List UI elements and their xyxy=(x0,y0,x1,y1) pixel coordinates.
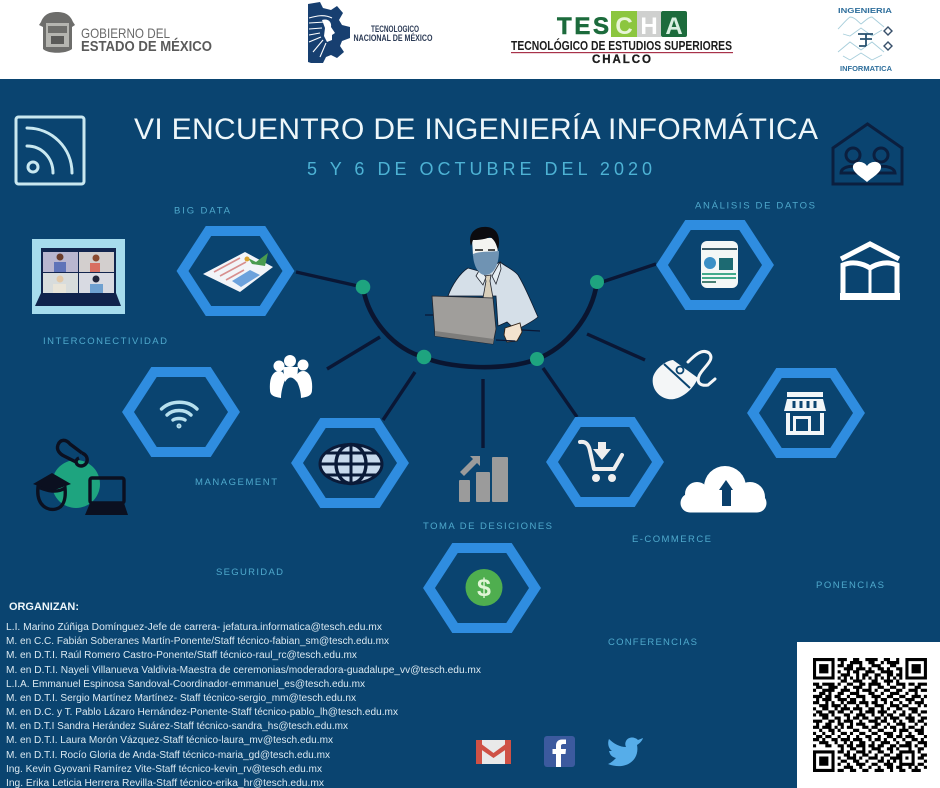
hexagon: finance xyxy=(429,548,535,628)
qr code xyxy=(797,642,940,788)
logo: TESCHA xyxy=(511,11,733,66)
label: security: SEGURIDAD xyxy=(216,567,283,578)
icon: twitter xyxy=(608,737,643,766)
connector lines xyxy=(296,264,656,448)
icon: gmail xyxy=(476,740,511,764)
icon: facebook xyxy=(544,736,575,767)
logo: Gobierno del Estado de México: GOBIERNO DEL xyxy=(81,25,170,41)
logo: Tecnológico Nacional de México xyxy=(308,2,432,63)
organizers list: Ing. Kevin Gyovani Ramírez Vite-Staff técnico-kevin_rv@tesch.edu.mx xyxy=(6,764,322,775)
logo: TESCHA: TES xyxy=(557,13,609,40)
icon: open book under roof xyxy=(840,244,900,300)
icon: dashboard document xyxy=(701,241,738,288)
hexagon: global xyxy=(297,423,403,503)
logo: Tecnológico Nacional de México: TECNOLOGICO xyxy=(371,24,419,34)
logo: Gobierno del Estado de México: ESTADO DE MÉXICO xyxy=(81,38,212,55)
logo: TESCHA: C xyxy=(615,13,633,40)
logo: TESCHA: TECNOLÓGICO DE ESTUDIOS SUPERIORES xyxy=(511,38,732,53)
header band with logos xyxy=(0,0,940,79)
label: interconnectivity: INTERCONECTIVIDAD xyxy=(43,336,167,347)
icon: computer mouse xyxy=(653,351,715,399)
icon: people group xyxy=(270,355,312,398)
hexagon: big data xyxy=(182,231,288,311)
icon: globe xyxy=(320,444,382,484)
hexagon: e-commerce xyxy=(552,422,658,502)
icon: report chart xyxy=(203,252,273,292)
labels xyxy=(43,200,884,648)
logo: TESCHA: H xyxy=(640,13,658,40)
icon: graduation and laptop xyxy=(33,440,128,515)
label: management: MANAGEMENT xyxy=(195,477,277,488)
icon: wifi xyxy=(162,402,197,427)
label: decision making: TOMA DE DESICIONES xyxy=(423,521,552,532)
organizers list xyxy=(6,622,481,788)
icon: storefront xyxy=(784,392,826,435)
organizers list: M. en D.T.I. Laura Morón Vázquez-Staff técnico-laura_mv@tesch.edu.mx xyxy=(6,735,333,746)
organizers list: M. en C.C. Fabián Soberanes Martín-Ponente/Staff técnico-fabian_sm@tesch.edu.mx xyxy=(6,636,389,647)
logo: TESCHA: CHALCO xyxy=(592,54,651,66)
icon: video call laptop xyxy=(32,239,125,314)
organizers list: M. en D.T.I Sandra Herández Suárez-Staff técnico-sandra_hs@tesch.edu.mx xyxy=(6,721,348,732)
logo: Gobierno del Estado de México xyxy=(39,12,212,55)
connector nodes xyxy=(356,275,604,366)
icon: growth bar chart xyxy=(459,456,508,502)
icon: dollar coin: $ xyxy=(477,574,491,602)
logo: TESCHA: A xyxy=(665,13,683,40)
organizers list: M. en D.T.I. Sergio Martínez Martínez- Staff técnico-sergio_mm@tesch.edu.nx xyxy=(6,693,356,704)
title: VI ENCUENTRO DE INGENIERÍA INFORMÁTICA xyxy=(134,113,818,146)
organizers list: L.I.A. Emmanuel Espinosa Sandoval-Coordinador-emmanuel_es@tesch.edu.mx xyxy=(6,679,365,690)
label: e-commerce: E-COMMERCE xyxy=(632,534,711,545)
organizers list: M. en D.T.I. Raúl Romero Castro-Ponente/Staff técnico-raul_rc@tesch.edu.mx xyxy=(6,650,357,661)
logo: Ingeniería Informática: INFORMATICA xyxy=(840,64,893,73)
icon: house with people and heart xyxy=(833,124,902,184)
date subtitle: 5 Y 6 DE OCTUBRE DEL 2020 xyxy=(307,159,652,179)
icon: upload cloud xyxy=(680,466,766,512)
hexagon: connectivity xyxy=(128,372,234,452)
organizers heading: ORGANIZAN: xyxy=(9,601,79,613)
organizers block xyxy=(6,601,481,788)
connector arc xyxy=(363,282,597,367)
logo: Ingeniería Informática xyxy=(838,6,893,73)
icon: shopping cart xyxy=(580,442,622,482)
organizers list: M. en D.T.I. Nayeli Villanueva Valdivia-Maestra de ceremonias/moderadora-guadalupe_vv@tesch.edu.mx xyxy=(6,665,481,676)
label: conferences: CONFERENCIAS xyxy=(608,637,697,648)
hexagon: shop xyxy=(753,373,859,453)
icon: rss xyxy=(16,117,84,184)
hexagon: data analysis xyxy=(662,225,768,305)
label: talks: PONENCIAS xyxy=(816,580,884,591)
central figure: man at laptop xyxy=(425,227,540,344)
label: big data: BIG DATA xyxy=(174,206,231,216)
label: data analysis: ANÁLISIS DE DATOS xyxy=(695,200,815,212)
organizers list: M. en D.C. y T. Pablo Lázaro Hernández-Ponente-Staff técnico-pablo_lh@tesch.edu.mx xyxy=(6,707,398,718)
organizers list: L.I. Marino Zúñiga Domínguez-Jefe de carrera- jefatura.informatica@tesch.edu.mx xyxy=(6,622,382,633)
organizers list: M. en D.T.I. Rocío Gloria de Anda-Staff técnico-maria_gd@tesch.edu.mx xyxy=(6,750,330,761)
logo: Ingeniería Informática: INGENIERIA xyxy=(838,6,893,15)
logo: Tecnológico Nacional de México: NACIONAL DE MÉXICO xyxy=(354,33,432,43)
